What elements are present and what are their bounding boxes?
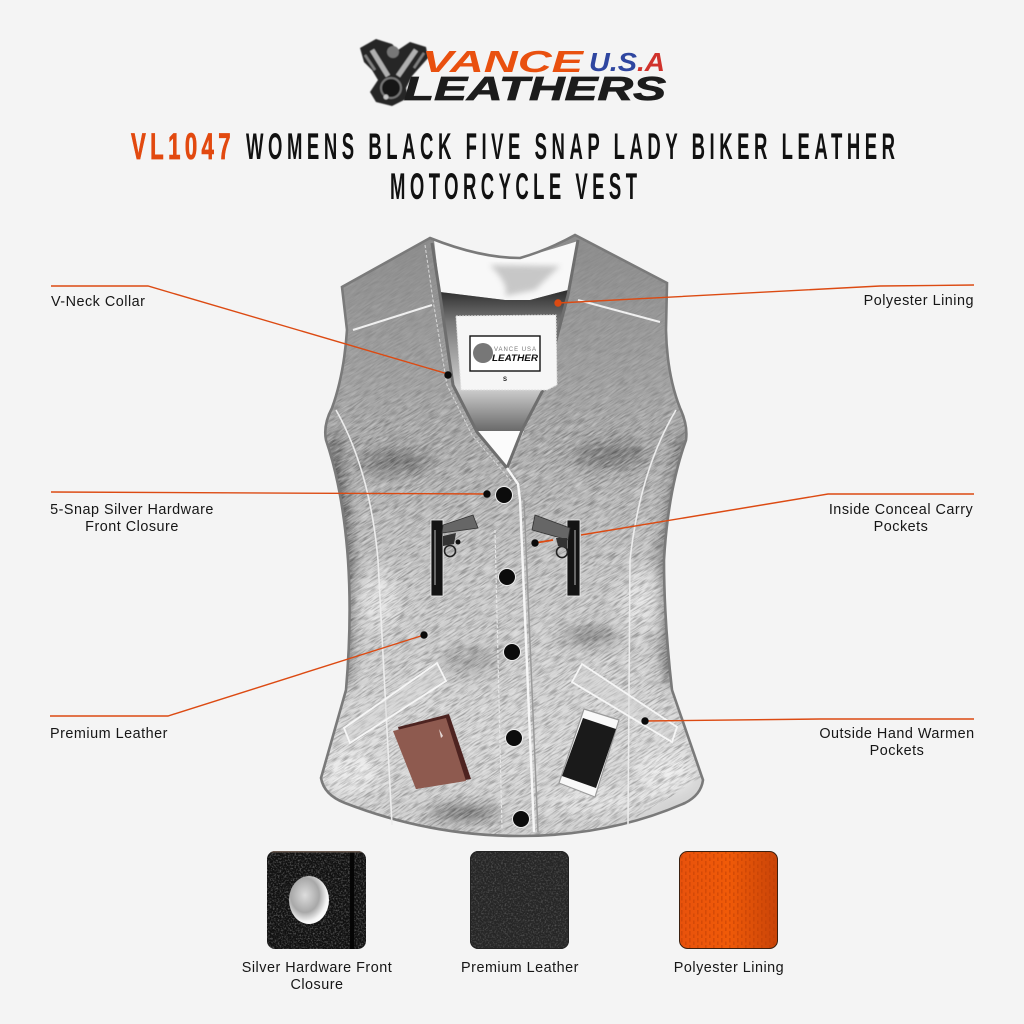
swatch caption: premium leather: Premium Leather (461, 960, 579, 976)
title (131, 126, 895, 208)
callout: Outside Hand Warmen Pockets: Pockets (870, 743, 924, 759)
callout: Polyester Lining (554, 285, 974, 309)
brand logo (360, 39, 666, 107)
brand logo: U.S (589, 47, 638, 77)
title: VL1047 (131, 126, 231, 167)
swatch caption: silver hardware: Silver Hardware Front (242, 960, 392, 976)
callout: Polyester Lining: Polyester Lining (864, 293, 974, 309)
title: MOTORCYCLE VEST (390, 167, 637, 208)
shading (324, 430, 693, 819)
callout: Premium Leather: Premium Leather (50, 726, 168, 742)
swatch caption: silver hardware (242, 960, 392, 993)
callout: Outside Hand Warmen Pockets (641, 717, 975, 759)
icon: brown wallet (393, 714, 471, 789)
size label (456, 315, 557, 390)
icon: right pistol (532, 515, 580, 596)
left pocket (344, 663, 446, 743)
callout: Inside Conceal Carry Pockets: Pockets (874, 519, 928, 535)
icon: v-twin engine (360, 39, 428, 106)
swatch: polyester lining (680, 852, 778, 948)
callout: Outside Hand Warmen Pockets: Outside Hand Warmen (819, 726, 975, 742)
snaps (496, 486, 530, 828)
vest body (322, 236, 702, 835)
size label: VANCE USA (494, 347, 536, 353)
callout: V-Neck Collar: V-Neck Collar (51, 294, 145, 310)
callout: 5-Snap Silver Hardware (50, 490, 491, 535)
brand logo: VANCE (422, 44, 585, 79)
callout: V-Neck Collar (51, 286, 452, 379)
swatch: premium leather (470, 851, 569, 949)
swatch caption: silver hardware: Closure (290, 977, 344, 993)
callout: Inside Conceal Carry Pockets (531, 494, 974, 547)
lining (441, 290, 568, 431)
swatch: silver hardware (267, 851, 366, 949)
callout: Premium Leather (50, 631, 428, 742)
callout: Inside Conceal Carry Pockets: Inside Conceal Carry (829, 502, 973, 518)
callout: 5-Snap Silver Hardware: 5-Snap Silver Hardware (50, 502, 214, 518)
icon: left pistol (431, 515, 478, 596)
right pocket (572, 664, 677, 742)
size label: LEATHER (492, 353, 539, 363)
collar inner (434, 240, 578, 300)
title: WOMENS BLACK FIVE SNAP LADY BIKER LEATHER (246, 127, 895, 168)
vest illustration (319, 234, 704, 838)
swatch caption: polyester lining: Polyester Lining (674, 960, 784, 976)
brand logo: .A (637, 47, 665, 77)
brand logo: LEATHERS (404, 70, 666, 107)
sewn outline and seams (321, 235, 703, 836)
callout: 5-Snap Silver Hardware: Front Closure (85, 519, 179, 535)
icon: smartphone (559, 709, 619, 797)
size label: S (503, 377, 507, 383)
